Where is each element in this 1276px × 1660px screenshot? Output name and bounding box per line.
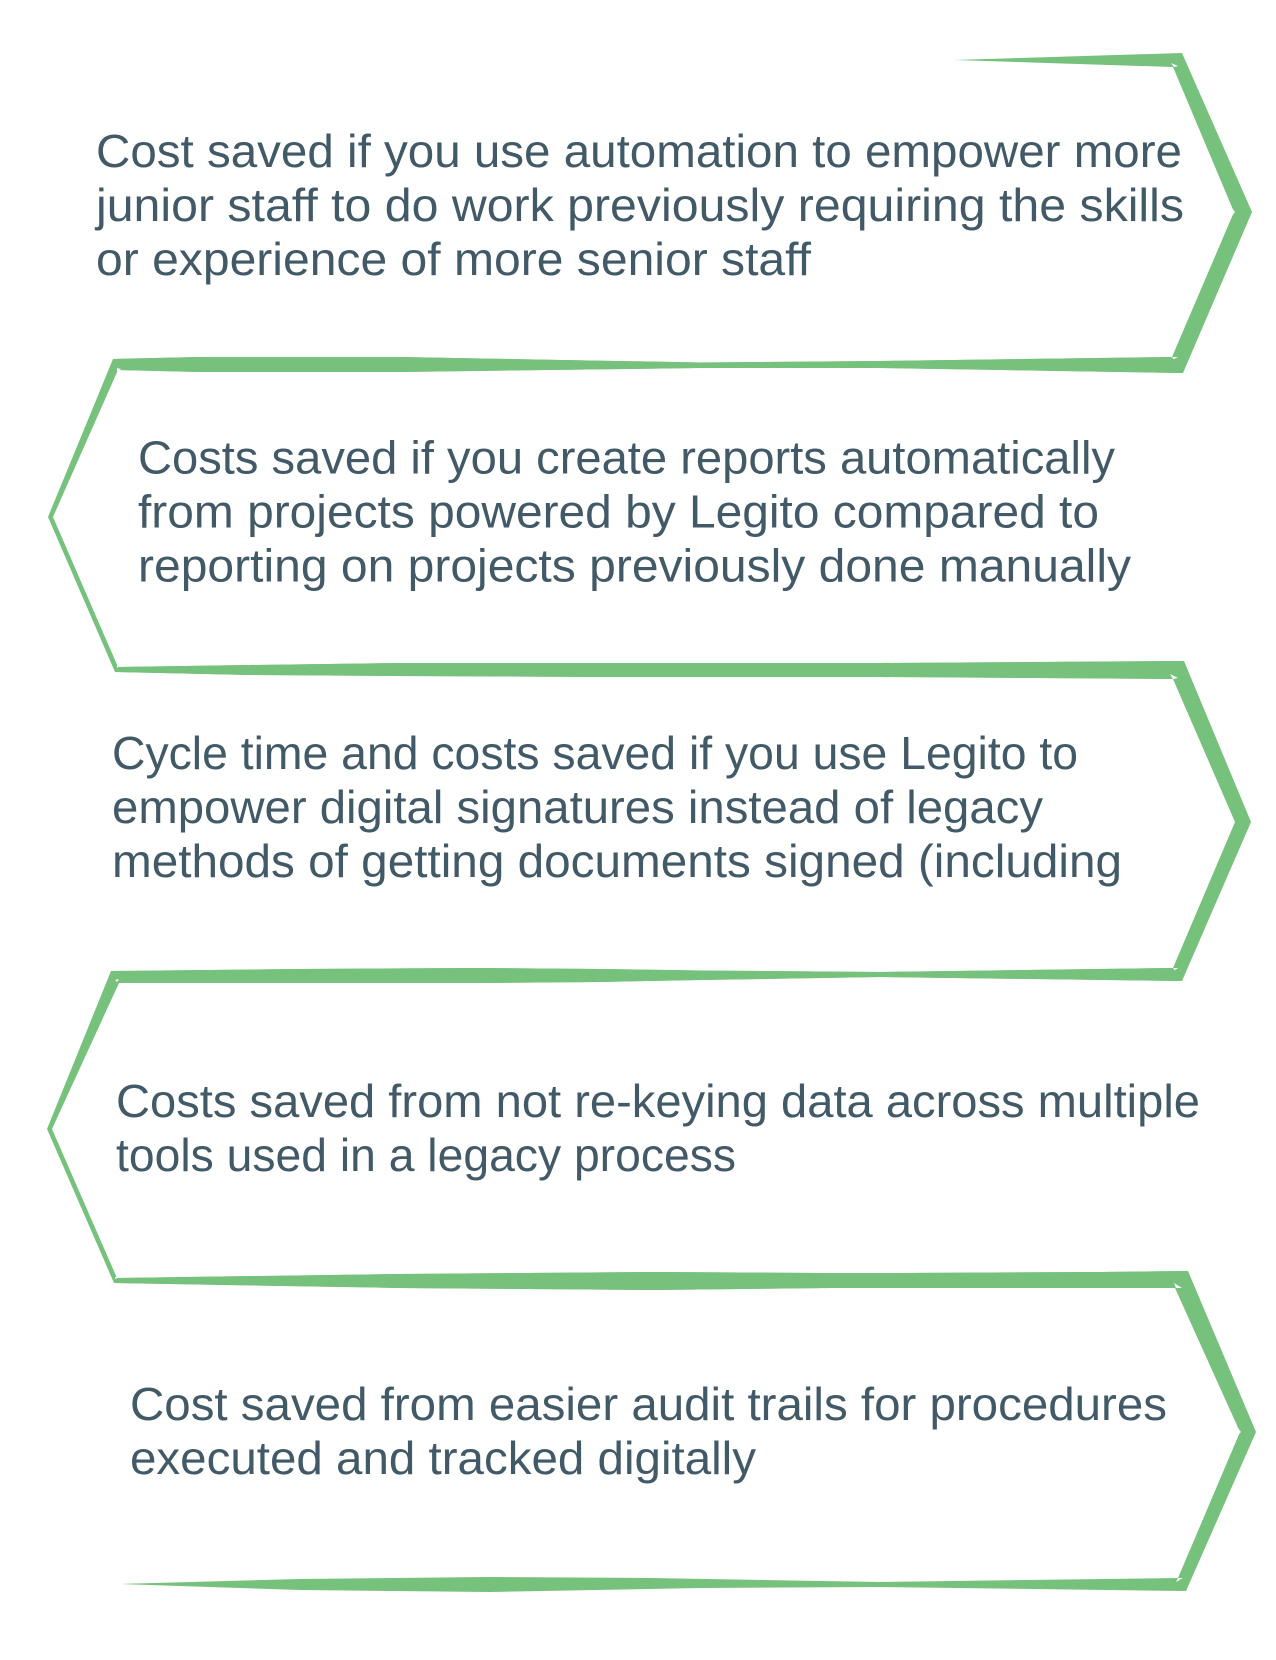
text block: panel 3: Cycle time and costs saved if you use Legito to — [112, 727, 1078, 779]
text block: panel 1: Cost saved if you use automation to empower more — [96, 125, 1182, 177]
text block: panel 5 — [130, 1378, 1167, 1484]
text block: panel 1: junior staff to do work previously requiring the skills — [94, 179, 1184, 231]
panel: re-keying data — [47, 968, 1200, 1290]
arrow outline: right-pointing, panel 1 — [113, 53, 1252, 373]
text block: panel 1 — [94, 125, 1184, 285]
arrow outline: left-pointing, panel 4 — [47, 968, 1187, 1290]
text block: panel 2: Costs saved if you create reports automatically — [138, 432, 1115, 484]
text block: panel 2: from projects powered by Legito compared to — [138, 486, 1099, 538]
panel: digital signatures — [111, 661, 1251, 983]
panel: junior staff automation — [94, 53, 1252, 373]
text block: panel 2: reporting on projects previously done manually — [138, 540, 1131, 592]
panel: audit trails — [114, 1271, 1256, 1592]
text block: panel 4: Costs saved from not re-keying data across multiple — [116, 1075, 1200, 1127]
text block: panel 5: executed and tracked digitally — [130, 1432, 756, 1484]
panel: automatic reports — [48, 357, 1184, 679]
text block: panel 4: tools used in a legacy process — [116, 1129, 736, 1181]
text block: panel 2 — [138, 432, 1131, 592]
arrow outline: left-pointing, panel 2 — [48, 357, 1184, 679]
text block: panel 3 — [112, 727, 1122, 887]
text block: panel 3: methods of getting documents signed (including — [112, 835, 1122, 887]
text block: panel 1: or experience of more senior staff — [96, 233, 811, 285]
text block: panel 5: Cost saved from easier audit trails for procedures — [130, 1378, 1167, 1430]
arrow outline: right-pointing, panel 5 — [114, 1271, 1256, 1592]
arrow outline: right-pointing, panel 3 — [111, 661, 1251, 983]
text block: panel 3: empower digital signatures instead of legacy — [112, 781, 1043, 833]
text block: panel 4 — [116, 1075, 1200, 1181]
